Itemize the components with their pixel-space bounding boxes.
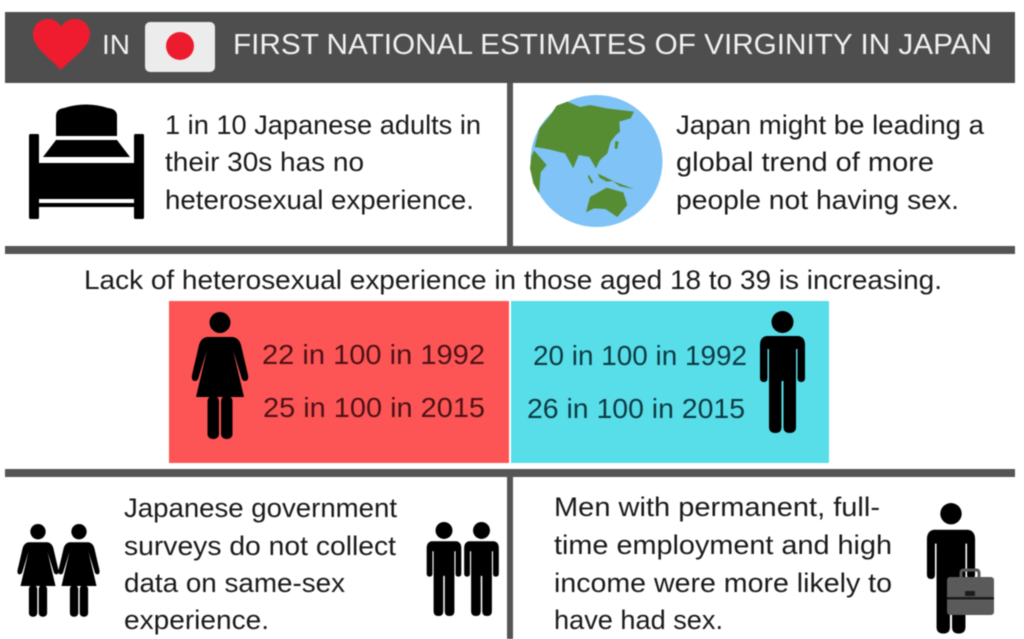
icon: two men [427,522,499,616]
panel: women statistics [169,301,509,463]
title: FIRST NATIONAL ESTIMATES OF VIRGINITY IN JAPAN [233,29,992,61]
text: bed statistic: 1 in 10 Japanese adults in [165,110,481,140]
text: employment and income: have had sex. [554,605,723,635]
text: same-sex data: data on same-sex [124,568,346,598]
text: women figures: 25 in 100 in 2015 [263,392,485,423]
panel: global trend [530,95,985,227]
header word: in: IN [102,29,130,60]
panel: employment and income [554,492,994,635]
text: women figures: 22 in 100 in 1992 [262,339,485,370]
text: same-sex data: surveys do not collect [124,531,397,561]
text: global trend: Japan might be leading a [676,110,985,140]
text: same-sex data [124,493,398,635]
panel: same-sex data [17,493,499,635]
text: same-sex data: Japanese government [124,493,398,523]
text: global trend [676,110,985,215]
icon: two women [17,524,100,617]
panel: bed statistic [29,104,481,219]
text: bed statistic [165,110,481,215]
icon: man with briefcase [927,503,994,634]
text: bed statistic: heterosexual experience. [165,185,474,215]
text: same-sex data: experience. [124,605,269,635]
text: global trend: people not having sex. [676,185,959,215]
header bar [5,12,1015,83]
text: men figures [527,340,747,424]
panel: men statistics [511,301,829,463]
icon: man [760,311,805,433]
icon: woman [192,312,248,439]
heading: trend statement: Lack of heterosexual experience in those aged 18 to 39 is increasing. [84,265,942,295]
text: women figures [262,339,485,423]
text: men figures: 26 in 100 in 2015 [527,393,745,424]
icon: globe [530,95,662,227]
text: employment and income: income were more likely to [554,568,892,598]
icon: heart [33,19,90,70]
text: employment and income: time employment and high [554,530,892,560]
text: global trend: global trend of more [676,147,934,177]
icon: bed [29,104,144,219]
icon: Japanese flag [145,22,215,72]
text: bed statistic: their 30s has no [165,147,364,177]
text: employment and income [554,492,892,635]
text: men figures: 20 in 100 in 1992 [533,340,747,371]
text: employment and income: Men with permanent, full- [554,492,880,522]
